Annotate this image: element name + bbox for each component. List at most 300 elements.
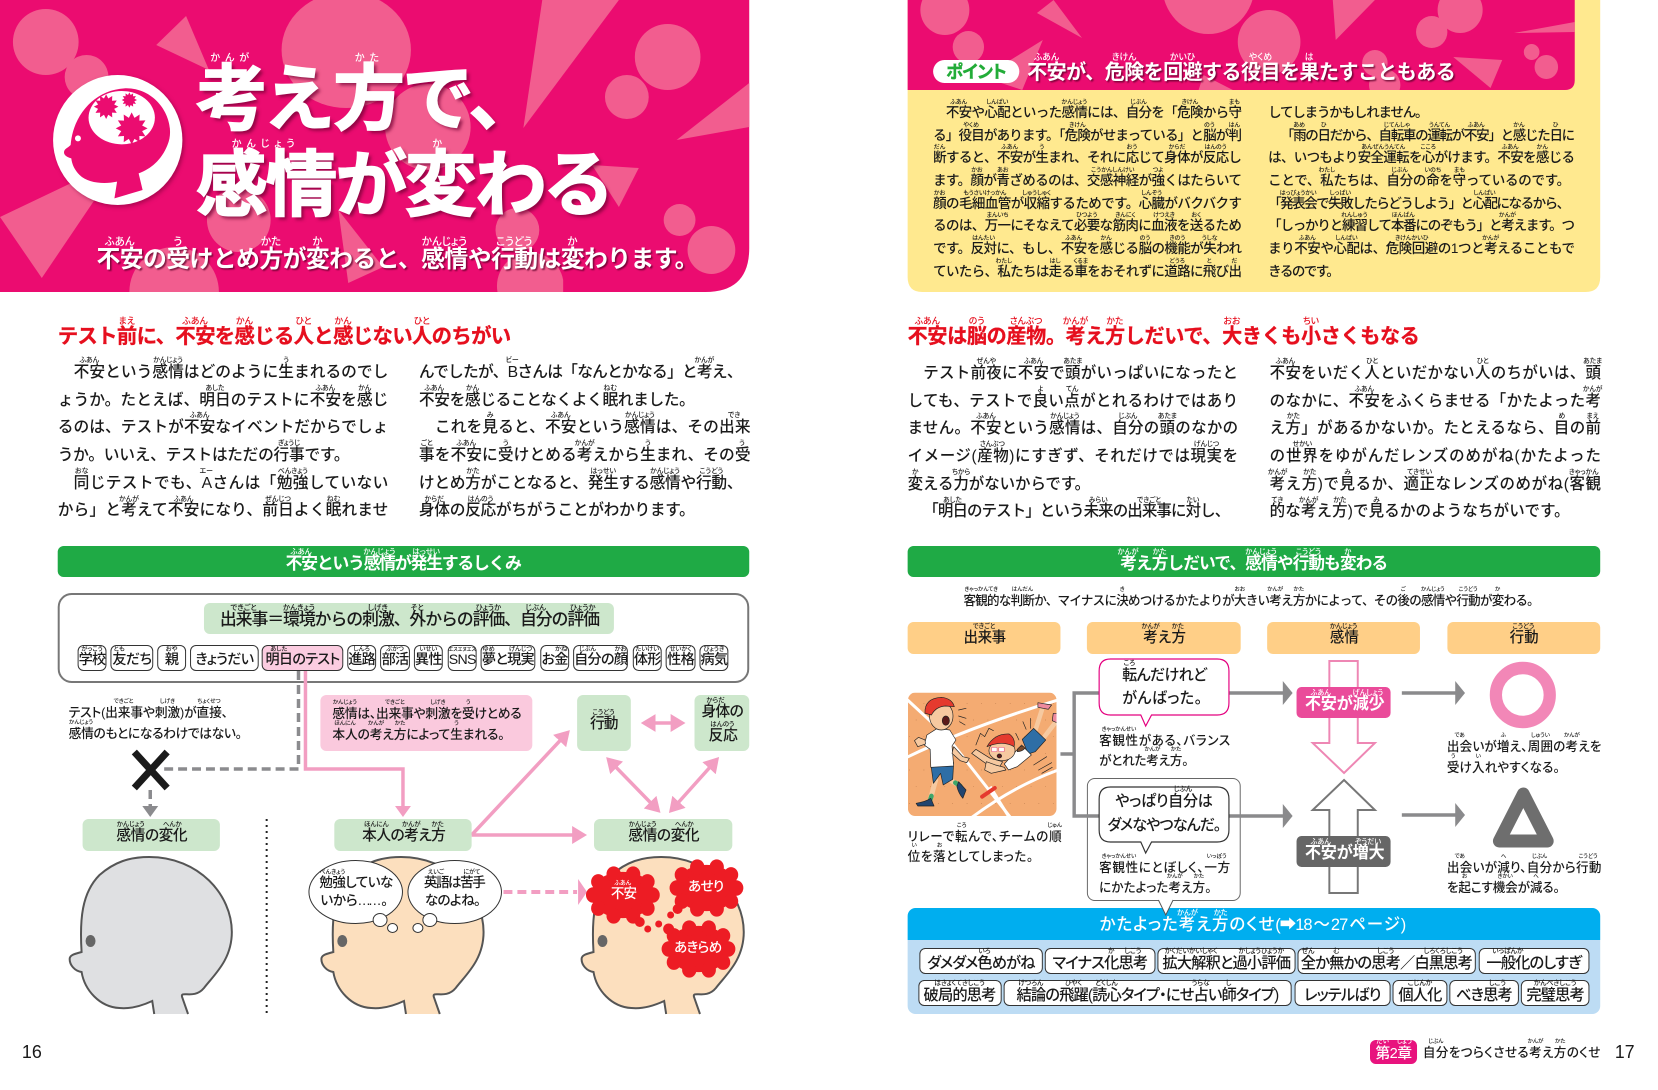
chips: event examples: 性格 [667,652,694,668]
point text column 1: つよ [1153,168,1163,174]
pink header with shapes [908,0,1575,90]
text block: left article column 2: はんのう [468,496,493,503]
right page: かんじょう [1421,587,1445,593]
text block: right article column 2: てきせい [1407,469,1432,476]
box: emotion change right: 感情の変化 [628,828,698,844]
point text column 1: のう [1140,236,1150,242]
text block: right article column 2: ひと [1477,358,1489,365]
callout: pink note: かんじょう [333,700,357,706]
icon: head with bursts [53,75,182,205]
text block: left article column 1: べんきょう [278,468,308,475]
banner: left page title: かんじょう [422,236,467,248]
head: neutral grey [70,857,232,1014]
point text column 2: まり不安や心配は、危険回避の1つと考えることもで [1268,241,1573,256]
box: behaviour: こうどう [592,709,615,716]
text: thought bubble 2: 英語は苦手 [424,875,484,890]
text block: right article column 1: ぜんや [977,358,996,365]
banner: left page title: か [432,139,447,150]
point text column 2: ふあん [1468,123,1485,129]
heading: right article: 不安は脳の産物。考え方しだいで、大きくも小さくもなる [908,325,1418,348]
text block: right article column 1: テスト前夜に不安で頭がいっぱいになったと [923,365,1237,382]
text block: right article column 1: ふあん [1024,358,1043,365]
label: anxiety increases: ふあん [1311,837,1331,846]
text block: right article column 1: ません。不安という感情は、自分の頭のなかの [908,420,1237,437]
chips: event examples: ゆめ [483,646,495,653]
text block: right article column 1 [908,357,1237,520]
text block: left article column 2: 身体の反応がちがうことがわかります。 [419,502,694,519]
chips: thinking habits: けつろん [1018,980,1043,987]
point text column 2: れんしゅう [1341,213,1367,219]
right page: おお [1223,316,1240,326]
chips: event examples: かね [555,646,567,653]
chips: thinking habits: 破局的思考 [924,987,996,1004]
text: balanced thought: 転んだけれど [1122,667,1204,684]
text block: right article column 2: み [1344,469,1351,476]
footer: chapter badge [1370,1040,1417,1064]
box: own way of thinking: かた [431,821,444,828]
subtitle: 不安の受けとめ方が変わると、感情や行動は変わります。 [97,246,697,273]
text block: left article column 2: かんが [694,357,714,364]
banner: left page title: かんじょう [232,139,300,150]
text block: left article column 2: かん [466,385,479,392]
text block: right article column 2: せかい [1293,441,1312,448]
point text column 2: きけんかいひ [1395,236,1428,242]
point text column 2 [1268,105,1574,279]
panel: point (yellow): は [1305,52,1314,62]
banner: left page title: かんが [210,53,254,64]
point text column 1: かお [934,191,945,197]
header: emotion: 感情 [1330,630,1357,646]
title line 2: 感情が変わる [196,146,604,226]
point text column 2: ほんばん [1392,213,1415,219]
diagram: how anxiety arises: しげき [368,603,388,612]
panel: point (yellow): きけん [1112,52,1136,62]
chips: thinking habits: はきょくてきしこう [934,980,985,987]
text block: left article column 1: エー [200,468,213,475]
box: own way of thinking: ほんにん [364,821,389,828]
panel: events [58,593,749,683]
text block: right article column 1: げんじつ [1194,441,1219,448]
point text column 2: いのち [1425,168,1441,174]
right page: かんが [1118,547,1139,556]
right page: ふあん [915,316,940,326]
text: good outcome: 受け入れやすくなる。 [1447,760,1559,775]
chips: event examples: 親 [165,652,178,668]
note: event is not direct cause [69,698,241,741]
header: emotion: かんじょう [1330,623,1357,630]
text: bad outcome: こうどう [1579,854,1598,860]
text block: right article column 1: あたま [1063,358,1082,365]
text block: right article column 2: え方」があるかないか。たとえるなら、目の前 [1270,420,1600,437]
chips: thinking habits: 結論の飛躍(読心タイプ・にせ占い師タイプ) [1016,987,1278,1004]
point text column 1: はし [1050,259,1061,265]
text block: right article column 2: かた [1333,497,1346,504]
text block: left article column 2: でき [728,412,740,419]
blue header [908,908,1600,940]
point text column 1: うしな [1202,236,1218,242]
text block: left article column 2: こうどう [699,468,723,475]
point text column 2: かん [1513,123,1525,129]
header: behaviour: 行動 [1510,630,1537,646]
text block: left article column 1: ふあん [174,496,193,503]
left page: ひと [414,316,430,326]
text block: right article column 2: てき [1271,497,1283,504]
text block: right article column 2: の世界をゆがんだレンズのめがね(かたよった [1270,448,1600,465]
text block: right article column 1: あたま [1158,413,1177,420]
illustration: relay runner falling [905,693,1058,820]
chips: thinking habits: レッテルばり [1304,987,1381,1004]
point text column 2: ひ [1553,123,1558,129]
point text column 1: まんいち [987,213,1008,219]
text block: right article column 2: かんが [1583,386,1602,393]
text block: left article column 1: かんが [119,496,139,503]
text: burst anxiety: 不安 [611,886,635,901]
point text column 1: かお [971,168,983,174]
text: thought bubble 2: えいご [428,870,444,876]
text: bad outcome [1447,853,1601,895]
point text column 2: ひ [1321,123,1326,129]
point text column 1: 断すると、不安が生まれ、それに応じて身体が反応し [933,150,1240,165]
text: thought bubble 1 [319,868,393,908]
callout: pink note: 感情は、出来事や刺激を受けとめる [332,706,520,721]
footer: chapter title: 自分をつらくさせる考え方のくせ [1423,1045,1599,1060]
head: thinking [321,857,484,1014]
event definition text: 出来事＝環境からの刺激、外からの評価、自分の評価 [220,610,598,629]
text: bad outcome: お [1462,874,1467,880]
right page: き [1120,587,1125,593]
caption: relay: お [937,843,942,849]
text: bad outcome: へ [1501,854,1506,860]
banner: left page title [0,0,750,292]
chips: event examples: びょうき [703,646,724,653]
chips: event examples: げんじつ [509,646,532,653]
section bar: anxiety mechanism [58,546,749,577]
point text column 1: あお [997,168,1009,174]
chips: thinking habits: 全か無かの思考／白黒思考 [1301,955,1472,972]
text block: left article column 2: ふあん [456,440,476,447]
diagram: how anxiety arises [58,593,750,1014]
left page: ふあん [182,316,208,326]
banner background with shapes [0,0,749,292]
arrows: emotion to behaviour [1402,681,1465,827]
box: behaviour: 行動 [590,716,617,732]
chips: thinking habits: かしょうひょうか [1239,948,1284,955]
right page: かんが [1063,316,1088,326]
light blue body [908,940,1600,1014]
text block: right article column 2: め [1558,413,1565,420]
text: balanced thinking note: かた [1171,747,1181,753]
text: balanced thinking note: 客観性がある、バランス [1099,733,1229,748]
text block: right article column 1: ちから [952,469,970,476]
left page: まえ [119,316,135,326]
point text column 1: はんのう [1204,145,1227,151]
text: good outcome: ふ [1501,733,1506,739]
diagram: how anxiety arises: できごと [230,603,257,612]
text: biased thought: やっぱり自分は [1115,793,1210,810]
chips: thinking habits: しろくろしこう [1424,948,1463,955]
text block: left article column 2: 事を不安に受けとめる考えから生まれ、その受 [419,447,749,464]
footer: chapter badge: 第2章 [1375,1045,1412,1062]
text block: left article column 2: う [645,440,651,447]
text: burst anxiety [611,880,636,901]
text: good outcome: 出会いが増え、周囲の考えを [1447,739,1600,754]
point text column 2: 「雨の日だから、自転車の運転が不安」と感じた日に [1281,128,1573,143]
right page: かた [1555,1039,1566,1045]
banner: left page title: かた [355,53,384,64]
chips: thinking habits: か [1108,948,1115,955]
text block: left article column 1: 不安という感情はどのように生まれるのでし [74,364,387,381]
callout: pink note: う [466,700,471,706]
text: bad outcome: きかい [1497,874,1513,880]
text block: right article column 2: 考え方)で見るか、適正なレンズのめがね(客観 [1270,476,1600,493]
text: burst resignation: あきらめ [674,940,720,955]
text block: right article column 1: さんぶつ [980,441,1005,448]
point text column 1: しゅうしゅく [1022,191,1051,197]
left page: かん [236,316,253,326]
icon: circle mark [1496,668,1550,722]
text: thought bubble 1: いから……。 [320,893,385,908]
arrows: relation between behaviour, body and emotion [609,723,716,810]
text block: left article column 2: ふあん [424,385,444,392]
chips: event examples [78,645,728,671]
right page: きゃっかんてき [964,587,998,593]
point text column 1: 顔の毛細血管が収縮するためです。心臓がバクバクす [933,196,1240,211]
right page: さんぶつ [1010,316,1042,326]
box: own way of thinking: かんが [402,821,421,828]
text block: right article column 2: ひと [1366,358,1378,365]
right page: じぶん [1428,1039,1443,1045]
label: anxiety increases: 不安が増大 [1305,844,1383,862]
chips: thinking habits: べき思考 [1456,987,1512,1004]
banner: left page title: か [567,236,577,248]
dotted divider [266,819,268,1014]
text block: right article column 2: のなかに、不安をふくらませる「かたよった考 [1270,393,1600,410]
diagram: thinking flow: ころ [1124,660,1135,667]
point text column 1: う [1039,145,1044,151]
title line 1: 考え方で、 [196,60,497,140]
text block: left article column 1: ふあん [316,385,335,392]
box: emotion change left [83,819,220,851]
text: good outcome [1447,732,1601,775]
text block: right article column 2: ふあん [1355,386,1374,393]
text block: right article column 2: 不安をいだく人といだかない人のちがいは、頭 [1270,365,1600,382]
callout: pink note: しげき [430,700,445,706]
note: event is not direct cause: しげき [160,699,175,705]
text: biased thinking note [1099,853,1230,895]
panel: point (yellow): かいひ [1170,52,1195,62]
text block: right article column 1: てん [1066,386,1078,393]
footer: chapter title [1423,1038,1600,1060]
point text column 1: ふあん [1065,236,1082,242]
chips: event examples: 進路 [348,652,375,668]
chips: thinking habits: 一般化のしすぎ [1486,955,1581,972]
text: bad outcome: を起こす機会が減る。 [1447,880,1559,895]
text block: left article column 2: かんが [575,440,595,447]
chips: thinking habits: 個人化 [1398,987,1442,1004]
text block: left article column 1: おな [75,468,88,475]
banner: left page title: か [312,236,323,248]
text block: left article column 1: ぜんじつ [265,496,291,503]
chips: event examples: たいけい [635,646,659,653]
right page: かんが [1267,587,1283,593]
right page: かた [1153,547,1167,556]
text block: right article column 2: かた [1287,413,1300,420]
diagram: how anxiety arises: ふあん [614,881,631,887]
section bar: thinking changes emotion [908,546,1600,577]
text block: right article column 1: 変える力がないからです。 [908,476,1089,493]
event definition box [204,603,614,634]
box: emotion change right: かんじょう [629,821,657,828]
chips: thinking habits: うらな [1192,980,1210,987]
arrow: anxiety decreases [1313,661,1375,773]
text: bad outcome: であ [1455,854,1465,860]
thought bubbles [309,860,501,932]
chips: event examples: きょうだい [195,652,253,668]
blue header title: かたよった考え方のくせ(➡18～27ページ) [1100,915,1405,934]
header: thinking: 考え方 [1143,630,1184,646]
text: biased thought: ダメなやつなんだ。 [1107,817,1218,834]
text block: left article column 2: んでしたが、Bさんは「なんとかなる」と考え、 [419,364,741,381]
callout: pink note [320,695,532,751]
text: balanced thinking note [1099,726,1230,768]
section bar title: 不安という感情が発生するしくみ [286,554,520,573]
point text column 1: きんにく [1115,213,1136,219]
diagram: how anxiety arises: ひょうか [570,603,596,612]
text block: left article column 2: 不安を感じることなくよく眠れました。 [419,392,694,409]
point text column 2: まも [1454,168,1465,174]
note: event is not direct cause: テスト(出来事や刺激)が直接、 [69,705,227,720]
text: balanced thinking note: きゃっかんせい [1102,727,1136,733]
right page: ご [1401,587,1406,593]
text block: left article column 2: う [739,440,745,447]
text block: left article column 2 [419,356,750,519]
callout: pink note: 本人の考え方によって生まれる。 [332,727,503,742]
chips: thinking habits: 完璧思考 [1526,987,1584,1004]
right page: おお [1235,587,1245,593]
diagram: how anxiety arises: かんきょう [283,603,315,612]
label: anxiety increases [1297,836,1391,867]
chips: thinking habits [918,947,1590,1006]
chips: event examples: いせい [419,646,437,653]
arrows: thinking to behaviour and emotion [472,733,583,835]
text block: left article column 1: かんじょう [153,357,183,364]
left page: はっせい [412,547,440,556]
box: emotion change right: へんか [675,821,694,828]
text block: left article column 2: からだ [424,496,444,503]
text block: left article column 2: けとめ方がことなると、発生する感情や行動、 [419,475,741,492]
chips: event examples: 病気 [700,652,727,668]
chips: event examples: とも [113,646,125,653]
text: balanced thinking note: がとれた考え方。 [1099,753,1187,768]
box: emotion change left: かんじょう [117,821,145,828]
text: good outcome: しゅうい [1531,733,1550,739]
footer: chapter badge: しょう [1397,1038,1412,1045]
point text column 2: かんが [1482,236,1499,242]
chips: event examples: ぶかつ [386,646,404,653]
head: emotional [582,857,744,1014]
point text column 1: しんぱい [986,100,1008,106]
header: thinking: かんが [1141,623,1160,630]
text: biased thinking note: かんが [1167,874,1183,880]
point text column 1: る」役目があります。「危険がせまっている」と脳が判 [933,128,1240,143]
point text column 1: からだ [1169,145,1185,151]
chips: thinking habits: ぜん [1302,948,1314,955]
box: own way of thinking [334,819,472,851]
text: good outcome: う [1451,754,1456,760]
chips: thinking habits: しこう [1377,948,1394,955]
label: anxiety decreases [1297,687,1391,718]
header: behaviour [1447,622,1600,654]
box: body reaction [695,695,749,751]
panel: point (yellow): やくめ [1249,52,1272,62]
point text column 2: あめ [1293,123,1305,129]
section bar title: 考え方しだいで、感情や行動も変わる [1120,554,1387,573]
diagram: thinking flow: じぶん [1174,786,1192,793]
diagram: thinking flow [908,622,1601,901]
emotion bursts [586,859,743,978]
point text column 1 [933,98,1242,279]
arrow: event to own way of thinking [305,671,411,817]
diagram: how anxiety arises: そと [411,603,424,612]
right page: のう [969,316,985,326]
panel: biased thinking habits: かた [1214,908,1228,917]
header: event [908,622,1060,654]
chips: event examples: あした [270,646,287,653]
right page: はんだん [1012,587,1033,593]
point text column 2: はっぴょうかい [1280,191,1317,197]
text block: left article column 1 [58,356,388,519]
panel: point (yellow) [908,0,1600,292]
right page [908,0,1634,1064]
lead text [963,586,1539,608]
banner: left page title: う [174,236,182,248]
text block: left article column 1: ふあん [190,412,209,419]
chips: thinking habits: し [1226,980,1232,987]
text block: left article column 1: かん [358,385,371,392]
box: emotion change left: 感情の変化 [116,828,186,844]
point text column 1: きのう [1169,236,1185,242]
text: thought bubble 2: なのよね。 [425,893,479,908]
text: biased thinking note: いっぽう [1207,854,1227,860]
caption: relay: ころ [957,823,966,829]
point text column 2: してしまうかもしれません。 [1268,105,1427,120]
label: anxiety increases: ぞうだい [1355,837,1381,846]
chips: thinking habits: いろ [978,948,991,955]
right page: かた [1106,316,1123,326]
point text column 1: しんぞう [1141,191,1162,197]
footer: chapter badge: だい [1376,1038,1389,1045]
chips: event examples: 学校 [79,652,105,668]
lead text: 客観的な判断か、マイナスに決めつけるかたよりが大きい考え方かによって、その後の感情や行動が変わる。 [963,593,1539,608]
point text column 2: わたし [1318,168,1335,174]
chips: thinking habits: マイナス化思考 [1052,955,1147,972]
text block: right article column 1: かんじょう [1050,413,1080,420]
caption: relay [908,822,1062,864]
text block: right article column 2 [1268,357,1602,520]
text: thought bubble 1: べんきょう [319,870,345,876]
connectors: event to thinking and onward [1060,681,1293,828]
text block: left article column 1: から」と考えて不安になり、前日よく眠れませ [58,502,387,519]
panel: biased thinking habits: かんが [1177,908,1198,917]
text: bad outcome: 出会いが減り、自分から行動 [1447,860,1600,875]
text block: left article column 2: かんじょう [650,468,680,475]
icon: triangle mark [1499,794,1547,841]
text block: left article column 2: ふあん [551,412,571,419]
text block: left article column 2: う [503,440,509,447]
text block: left article column 2: はっせい [590,468,616,475]
point text column 1: はんたい [972,236,995,242]
chips: thinking habits: いっぱんか [1492,948,1524,955]
